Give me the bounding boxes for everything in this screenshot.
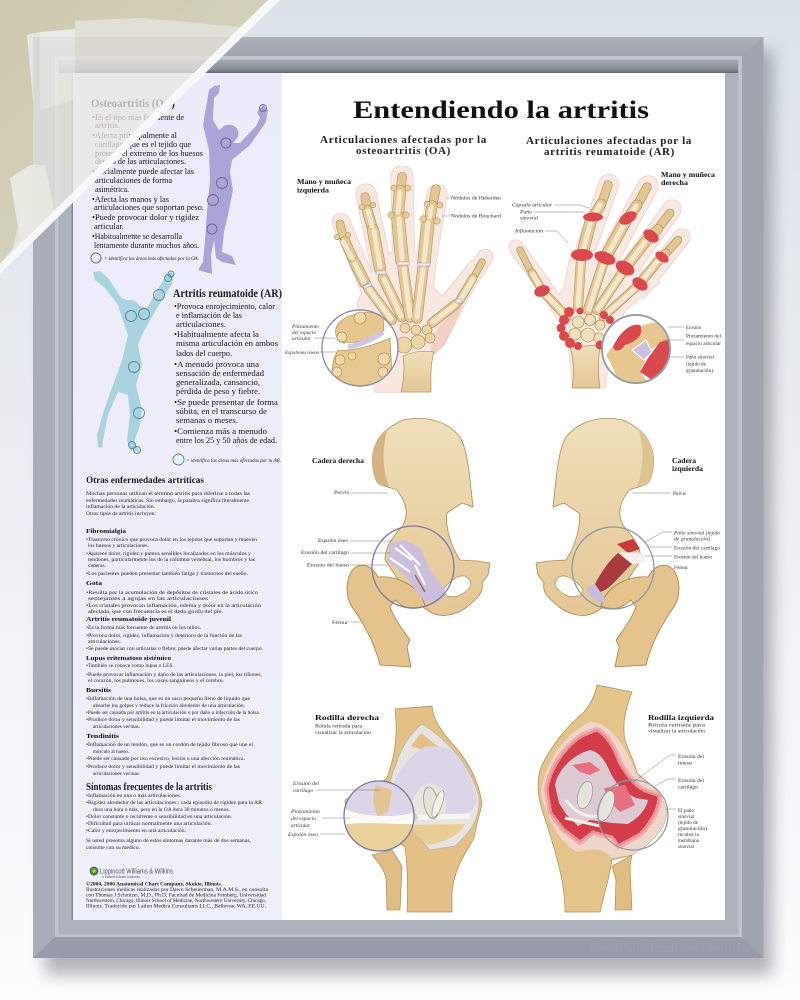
- text block: osteoarthritis: lentamente durante muchos años.: [94, 240, 199, 250]
- text block: common symptoms: •Inflamación en una o más articulaciones.: [86, 792, 181, 799]
- legend: osteoarthritis: [91, 253, 199, 263]
- text block: common symptoms: •Dificultad para utilizar normalmente una articulación.: [86, 820, 212, 827]
- labels: left hand: Nódulos de Bouchard: [451, 214, 502, 220]
- labels: left hand: articular: [292, 337, 311, 342]
- text block: common symptoms: Si usted presenta alguno de estos síntomas durante más de dos semanas,: [86, 838, 252, 844]
- text block: osteoarthritis: asimétrica.: [95, 184, 129, 194]
- copyright credits: con Thomas J Schnitzer, M.D., Ph.D, Facultad de Medicina Feinberg, Universidad: [86, 894, 267, 898]
- panel: left lavender column: [73, 73, 282, 920]
- illustration: right hip with osteoarthritis: [301, 418, 490, 667]
- labels: left hip: Erosión del hueso: [674, 556, 713, 560]
- labels: left knee: Rótula retirada para: [648, 724, 706, 728]
- text block: other arthritic diseases: Tendinitis: [86, 733, 120, 740]
- text block: rheumatoid arthritis: entre los 25 y 50 años de edad.: [176, 435, 277, 445]
- labels: left hip: [632, 456, 721, 571]
- labels: right hand: Paño sinovial: [686, 356, 715, 360]
- heading: rheumatoid arthritis joints: [526, 136, 692, 158]
- text block: common symptoms: consulte con su médico.: [86, 845, 140, 851]
- text block: other arthritic diseases: Gota: [86, 580, 103, 587]
- labels: right hip: [301, 456, 392, 626]
- labels: right hand: Inflamación: [514, 230, 544, 234]
- illustration: left hip with rheumatoid arthritis: [536, 418, 721, 667]
- labels: right knee: Rodilla derecha: [315, 713, 379, 722]
- labels: left knee: granulación): [678, 827, 707, 832]
- poster sheet: [73, 73, 725, 920]
- text block: other arthritic diseases: Otros tipos de artritis incluyen:: [86, 511, 157, 517]
- labels: left hip: Paño sinovial (tejido: [673, 532, 721, 536]
- labels: left knee: sinovial: [678, 845, 695, 850]
- text block: other arthritic diseases: •Inflamación de un tendón, que es un cordón de tejido fibroso que une el: [86, 741, 254, 748]
- labels: right knee: visualizar la articulación: [315, 731, 372, 736]
- text block: rheumatoid arthritis: •A menudo provoca una: [174, 359, 259, 369]
- legend: rheumatoid arthritis: [173, 454, 281, 465]
- text block: rheumatoid arthritis: generalizada, cansancio,: [176, 377, 260, 387]
- labels: right hand: (tejido de: [686, 362, 707, 368]
- text block: rheumatoid arthritis: Artritis reumatoide (AR): [173, 288, 282, 300]
- text block: rheumatoid arthritis: •Provoca enrojecimiento, calor: [174, 301, 275, 311]
- labels: right knee: [287, 713, 380, 838]
- inset: joint space narrowing and bone spurs: [322, 310, 398, 395]
- labels: left knee: Erosión del: [678, 779, 705, 784]
- text block: osteoarthritis: artritis.: [95, 120, 120, 130]
- frame watermark: DeviPainToolbox Demo: [590, 941, 740, 955]
- heading: rheumatoid arthritis joints: Articulaciones afectadas por la: [526, 136, 692, 147]
- labels: left knee: Erosión del: [678, 755, 705, 760]
- labels: right hand: Pinzamiento del: [686, 334, 722, 340]
- labels: right knee: Erosión del: [292, 782, 320, 787]
- text block: other arthritic diseases: tendones, particularmente los de la columna vertebral, los hombros y las: [88, 557, 255, 563]
- labels: right hand: espacio articular: [686, 342, 721, 347]
- labels: right hand: derecha: [661, 178, 688, 187]
- labels: right hand: Erosión: [686, 326, 701, 331]
- text block: rheumatoid arthritis: pérdida de peso y fiebre.: [176, 386, 260, 396]
- text block: other arthritic diseases: •Trastorno crónico que provoca dolor en los tejidos que soportan y mueven: [86, 537, 257, 543]
- illustration: right knee with osteoarthritis: [287, 706, 482, 912]
- text block: other arthritic diseases: •También se conoce como lupus o LES.: [86, 663, 174, 669]
- text block: other arthritic diseases: •Los pacientes pueden presentar también fatiga y trastornos del sueño.: [86, 570, 248, 577]
- text block: common symptoms: •Rigidez alrededor de las articulaciones ; cada episodio de rigidez para la AR: [86, 800, 262, 806]
- labels: right hand: Cápsula articular: [512, 204, 552, 208]
- labels: right hip: Erosión del cartílago: [301, 551, 350, 556]
- text block: other arthritic diseases: semejantes a agujas en las articulaciones: [88, 596, 208, 602]
- text block: other arthritic diseases: Bursitis: [86, 687, 111, 694]
- copyright credits: Northwestern, Chicago, Illinois School of Medicine, Northwestern University, Chicago,: [86, 899, 266, 904]
- text block: other arthritic diseases: los huesos y articulaciones.: [88, 543, 149, 549]
- text block: common symptoms: Síntomas frecuentes de la artritis: [86, 782, 212, 793]
- text block: rheumatoid arthritis: •Se puede presentar de forma: [174, 397, 278, 407]
- text block: other arthritic diseases: •Puede ser causado por uso excesivo, lesión o una afección reumática.: [86, 755, 245, 762]
- text block: rheumatoid arthritis: lados del cuerpo.: [176, 348, 232, 358]
- text block: osteoarthritis: protege el extremo de los huesos: [95, 148, 203, 158]
- publisher logo: [90, 867, 173, 879]
- labels: left hand: Espolones óseos: [284, 351, 319, 356]
- labels: left hip: de granulación): [674, 538, 710, 542]
- labels: left knee: cartílago: [678, 786, 699, 790]
- inset: cartilage erosion: [343, 780, 415, 852]
- labels: left hand: Pinzamiento: [291, 325, 320, 330]
- labels: right hip: Espolón óseo: [318, 539, 349, 544]
- text block: osteoarthritis: •Inicialmente puede afectar las: [92, 166, 194, 176]
- legend: rheumatoid arthritis: = identifica las áreas más afectadas por la AR.: [186, 459, 281, 464]
- text block: other arthritic diseases: músculo al hueso.: [93, 749, 129, 755]
- labels: right hip: Fémur: [332, 621, 348, 626]
- heading: osteoarthritis joints: [320, 135, 487, 157]
- labels: left knee: El paño: [678, 809, 695, 814]
- text block: common symptoms: •Dolor constante o recurrente o sensibilidad en una articulación.: [86, 814, 232, 820]
- text block: other arthritic diseases: •Produce dolor y sensibilidad y puede limitar el movimiento de las: [86, 764, 240, 770]
- labels: left knee: membrana: [678, 839, 700, 844]
- illustration: left hand with osteoarthritis: [284, 177, 502, 395]
- labels: right hip: Erosión del hueso: [307, 564, 350, 568]
- text block: rheumatoid arthritis: e inflamación de las: [176, 310, 242, 320]
- text block: other arthritic diseases: articulaciones vecinas.: [93, 724, 140, 730]
- text block: other arthritic diseases: [86, 476, 263, 777]
- text block: other arthritic diseases: •Provoca dolor, rigidez, inflamación y deterioro de la función de las: [86, 632, 242, 639]
- text block: rheumatoid arthritis: misma articulación en ambos: [176, 338, 278, 348]
- text block: common symptoms: dura una hora o más, pero en la OA dura 30 minutos o menos.: [93, 807, 230, 813]
- text block: osteoarthritis: •Afecta principalmente al: [92, 130, 178, 140]
- text block: rheumatoid arthritis: semanas o meses.: [176, 415, 238, 425]
- text block: osteoarthritis: articulaciones que soportan peso.: [94, 202, 204, 212]
- publisher logo: Lippincott Williams & Wilkins: [100, 868, 173, 876]
- labels: right hand: Mano y muñeca: [661, 170, 715, 179]
- film edge highlight: [0, 0, 280, 274]
- labels: left knee: (tejido de: [678, 821, 699, 826]
- labels: right hand: granulación): [686, 369, 713, 374]
- text block: other arthritic diseases: articulaciones vecinas.: [93, 771, 140, 777]
- text block: other arthritic diseases: •Puede provocar inflamación y daño de las articulaciones, la piel, los riñones,: [86, 671, 263, 678]
- labels: right knee: cartílago: [293, 789, 314, 794]
- labels: left hand: [284, 177, 502, 356]
- text block: rheumatoid arthritis: sensación de enfermedad: [176, 368, 265, 378]
- text block: osteoarthritis: [91, 96, 204, 250]
- text block: other arthritic diseases: Artritis reumatoide juvenil: [86, 616, 171, 623]
- labels: right hand: Paño: [519, 210, 533, 216]
- text block: other arthritic diseases: •Aparece dolor, rigidez y puntos sensibles localizados en los músculos y: [86, 551, 251, 557]
- inset circle: [598, 780, 668, 850]
- labels: left hand: del espacio: [292, 331, 317, 336]
- text block: rheumatoid arthritis: •Comienza más a menudo: [174, 426, 267, 436]
- text block: other arthritic diseases: •Inflamación de una bolsa, que es un saco pequeño lleno de líquido que: [86, 695, 251, 702]
- text block: other arthritic diseases: •Se puede asociar con urticarias o fiebre; puede afectar varias partes del cuerpo.: [86, 645, 263, 652]
- heading: osteoarthritis joints: Articulaciones afectadas por la: [320, 135, 487, 146]
- illustration: left knee with rheumatoid arthritis: [538, 685, 714, 912]
- text block: other arthritic diseases: Lupus eritematoso sistémico: [86, 655, 172, 662]
- labels: left hip: izquierda: [672, 464, 703, 473]
- labels: left hand: izquierda: [297, 186, 329, 194]
- text block: osteoarthritis: articulaciones de forma: [95, 175, 172, 185]
- text block: osteoarthritis: dentro de las articulaciones.: [95, 156, 186, 166]
- heading: osteoarthritis joints: osteoartritis (OA): [356, 146, 451, 157]
- text block: common symptoms: •Calor y enrojecimiento en una articulación.: [86, 828, 186, 834]
- text block: osteoarthritis: articular.: [94, 221, 124, 231]
- labels: left knee: hueso: [678, 762, 693, 766]
- labels: right knee: Pinzamiento: [290, 810, 321, 815]
- labels: right knee: del espacio: [291, 817, 317, 822]
- copyright credits: ©2004, 2006 Anatomical Chart Company, Skokie, Illinois.: [86, 882, 222, 888]
- figure: osteoarthritis body map: [198, 85, 268, 274]
- labels: left hip: Fémur: [674, 566, 688, 571]
- labels: left knee: visualizar la articulación: [648, 730, 706, 734]
- text block: other arthritic diseases: articulaciones.: [88, 639, 121, 645]
- labels: left hip: Cadera: [672, 456, 696, 465]
- inset: synovial granulation: [602, 315, 672, 390]
- labels: right knee: Rótula retirada para: [315, 724, 363, 730]
- heading: rheumatoid arthritis joints: artritis reumatoide (AR): [544, 147, 675, 158]
- copyright credits: Ilustraciones médicas realizadas por Dawn Scheuerman, M.A.M.S., en consulta: [86, 888, 269, 893]
- labels: left knee: Rodilla izquierda: [648, 713, 714, 722]
- text block: other arthritic diseases: caderas.: [88, 563, 106, 569]
- text block: common symptoms: [86, 782, 262, 851]
- text block: other arthritic diseases: Otras enfermedades artríticas: [86, 476, 204, 486]
- labels: right hip: Cadera derecha: [312, 456, 364, 465]
- labels: left knee: recubre la: [678, 833, 700, 838]
- labels: right hand: [512, 170, 722, 374]
- labels: left hand: Mano y muñeca: [297, 177, 351, 186]
- text block: other arthritic diseases: •Puede ser causada por artritis en la articulación o por daño o infección de la bolsa.: [86, 709, 260, 716]
- text block: other arthritic diseases: el corazón, los pulmones, los vasos sanguíneos y el cerebro.: [88, 678, 224, 684]
- text block: other arthritic diseases: enfermedades reumáticas. Sin embargo, la palabra significa literalmente: [86, 497, 250, 504]
- labels: left knee: sinovial: [678, 815, 695, 820]
- text block: other arthritic diseases: Muchas personas utilizan el término artritis para referirse a todas las: [86, 490, 250, 497]
- text block: other arthritic diseases: •Los cristales provocan inflamación, edema y dolor en la articulación: [86, 602, 261, 609]
- labels: right knee: Espolón óseo: [287, 833, 319, 838]
- copyright credits: [86, 882, 269, 910]
- labels: right hip: Pelvis: [334, 491, 349, 496]
- publisher logo: a Wolters Kluwer business: [102, 875, 140, 879]
- labels: left hip: Pelvis: [673, 492, 686, 497]
- text block: other arthritic diseases: •Resulta por la acumulación de depósitos de cristales de ácido úrico: [86, 590, 258, 596]
- figure: rheumatoid arthritis body map: [93, 271, 174, 454]
- text block: osteoarthritis: Osteoartritis (OA): [91, 96, 175, 110]
- labels: left hip: Erosión del cartílago: [674, 546, 721, 552]
- labels: right knee: articular: [291, 824, 310, 829]
- text block: other arthritic diseases: •Es la forma más frecuente de artritis en los niños.: [86, 624, 201, 631]
- peeled protective film corner: [0, 0, 280, 300]
- legend: osteoarthritis: = identifica las áreas más afectadas por la OA.: [104, 257, 199, 262]
- text block: rheumatoid arthritis: [173, 288, 282, 445]
- text block: other arthritic diseases: inflamación de la articulación.: [86, 503, 155, 510]
- labels: right hand: sinovial: [520, 216, 539, 222]
- text block: other arthritic diseases: Fibromialgia: [86, 528, 127, 535]
- text block: other arthritic diseases: absorbe los golpes y reduce la fricción alrededor de una articulación.: [93, 702, 245, 709]
- text block: rheumatoid arthritis: •Habitualmente afecta la: [174, 329, 259, 339]
- text block: rheumatoid arthritis: articulaciones.: [176, 319, 226, 329]
- text block: rheumatoid arthritis: súbita, en el transcurso de: [176, 406, 267, 416]
- copyright credits: Illinois. Traducido por Latino Medica Consultants LLC., Bellevue, WA, EE.UU.: [86, 904, 266, 910]
- text block: osteoarthritis: •Puede provocar dolor y rigidez: [92, 212, 199, 222]
- text block: other arthritic diseases: afectada, que con frecuencia es el dedo gordo del pie.: [88, 608, 223, 615]
- labels: left hand: Nódulos de Heberden: [451, 196, 502, 202]
- text block: other arthritic diseases: •Produce dolor y sensibilidad y puede limitar el movimiento de las: [86, 717, 240, 723]
- text block: osteoarthritis: •Es el tipo más frecuente de: [92, 112, 184, 122]
- text block: osteoarthritis: •Habitualmente se desarrolla: [92, 231, 182, 241]
- illustration: right hand with rheumatoid arthritis: [512, 170, 722, 390]
- text block: osteoarthritis: cartílago, que es el tejido que: [95, 139, 191, 149]
- text block: osteoarthritis: •Afecta las manos y las: [92, 194, 169, 204]
- title: Entendiendo la artritis: [353, 97, 649, 124]
- labels: left knee: [632, 713, 714, 850]
